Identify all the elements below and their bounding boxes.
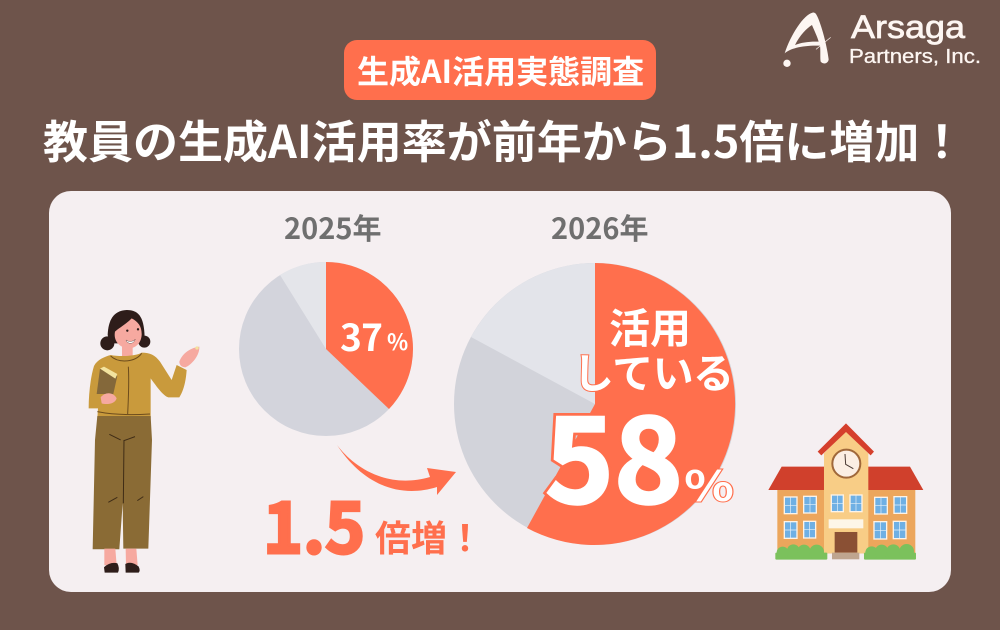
icon: teacher: [89, 310, 199, 573]
icon: school building: [768, 423, 923, 560]
callout: 1.5倍増: [263, 473, 483, 573]
callout: 活用している 58%: 58: [545, 369, 683, 537]
value: 37%: %: [387, 325, 408, 357]
label: 2025: 2025年: [284, 206, 381, 248]
callout: 1.5倍増: 1.5: [263, 473, 365, 573]
logo subline: Partners, Inc.: [849, 46, 981, 68]
logo: Arsaga Partners: [783, 9, 981, 68]
callout: 活用している 58%: 活用: [609, 295, 691, 355]
pie chart 2026: [454, 263, 736, 545]
pie chart 2025: [239, 262, 413, 436]
arrow: [337, 445, 456, 495]
logo name: Arsaga: [851, 9, 965, 45]
value: 37%: [340, 308, 408, 362]
callout: 1.5倍増: 倍増！: [375, 510, 483, 562]
callout: 活用している 58%: 58: [545, 369, 683, 537]
callout: 活用している 58%: している: [573, 340, 734, 400]
entrance: [829, 519, 863, 528]
title: 教員の生成AI活用率が前年から1.5倍に増加！: [43, 106, 964, 171]
value: 37%: 37: [340, 308, 383, 362]
bushes: [775, 544, 916, 560]
icon: logo mark: [783, 12, 831, 67]
callout: 活用している 58%: %: [684, 453, 734, 514]
panel: survey results: [49, 191, 951, 592]
clock: [832, 450, 860, 478]
label: 2026: 2026年: [551, 206, 648, 248]
windows: [784, 495, 907, 539]
callout: 活用している 58%: [545, 295, 734, 537]
heading pill: 生成AI活用実態調査: [357, 47, 644, 93]
